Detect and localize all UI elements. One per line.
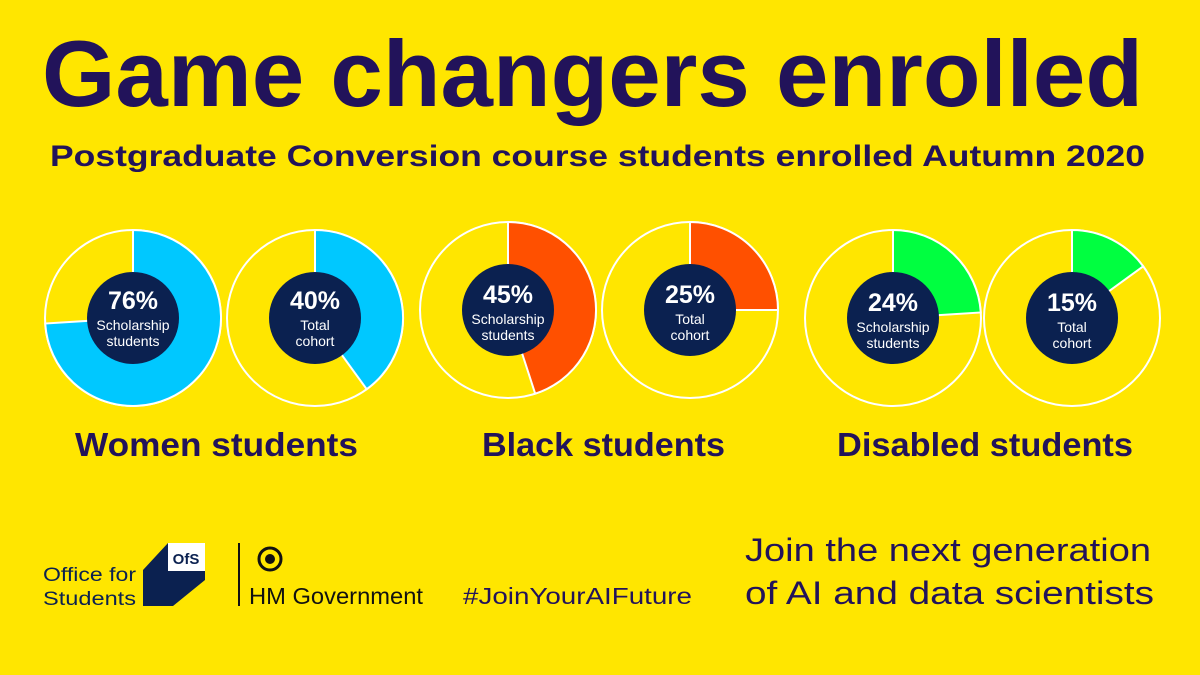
donut: disabled total 15%: Total (1057, 319, 1087, 335)
donut: disabled total 15%: cohort (1053, 335, 1092, 351)
donut: black total 25%: 25% (665, 281, 715, 309)
title: Game changers enrolled (42, 21, 1143, 126)
donut: disabled scholarship 24%: 24% (868, 289, 918, 317)
donut: women scholarship 76% (45, 230, 221, 406)
donut: women total 40%: 40% (290, 287, 340, 315)
logo: office for students: OfS (173, 551, 199, 568)
call to action: of AI and data scientists (745, 575, 1154, 611)
donut: black scholarship 45%: Scholarship (471, 311, 545, 327)
donut: black scholarship 45% (420, 222, 596, 398)
donut: black total 25% (602, 222, 778, 398)
logo: HM Government: HM Government (249, 583, 424, 609)
logo: office for students: Students (43, 589, 136, 610)
donut: women scholarship 76%: 76% (108, 287, 158, 315)
donut: disabled scholarship 24%: students (867, 335, 919, 351)
donut: women scholarship 76%: students (107, 333, 159, 349)
label: black students: Black students (482, 426, 725, 463)
label: women students: Women students (75, 426, 358, 463)
logo: HM Government (238, 543, 424, 609)
donut: black total 25%: cohort (671, 327, 710, 343)
donut: disabled scholarship 24%: Scholarship (856, 319, 930, 335)
hashtag: #JoinYourAIFuture (463, 583, 692, 609)
donut: black scholarship 45%: 45% (483, 281, 533, 309)
donut: disabled total 15%: 15% (1047, 289, 1097, 317)
label: disabled students: Disabled students (837, 426, 1133, 463)
donut: disabled total 15% (984, 230, 1160, 406)
logo: office for students (43, 543, 205, 610)
donut: women total 40%: Total (300, 317, 330, 333)
donut: women total 40%: cohort (296, 333, 335, 349)
subtitle: Postgraduate Conversion course students enrolled Autumn 2020 (50, 140, 1145, 173)
donut: disabled scholarship 24% (805, 230, 981, 406)
donut: black scholarship 45%: students (482, 327, 534, 343)
donut: women total 40% (227, 230, 403, 406)
call to action (745, 532, 1154, 611)
donut: women scholarship 76%: Scholarship (96, 317, 170, 333)
logo: office for students: Office for (43, 565, 137, 586)
call to action: Join the next generation (745, 532, 1151, 568)
donut: black total 25%: Total (675, 311, 705, 327)
